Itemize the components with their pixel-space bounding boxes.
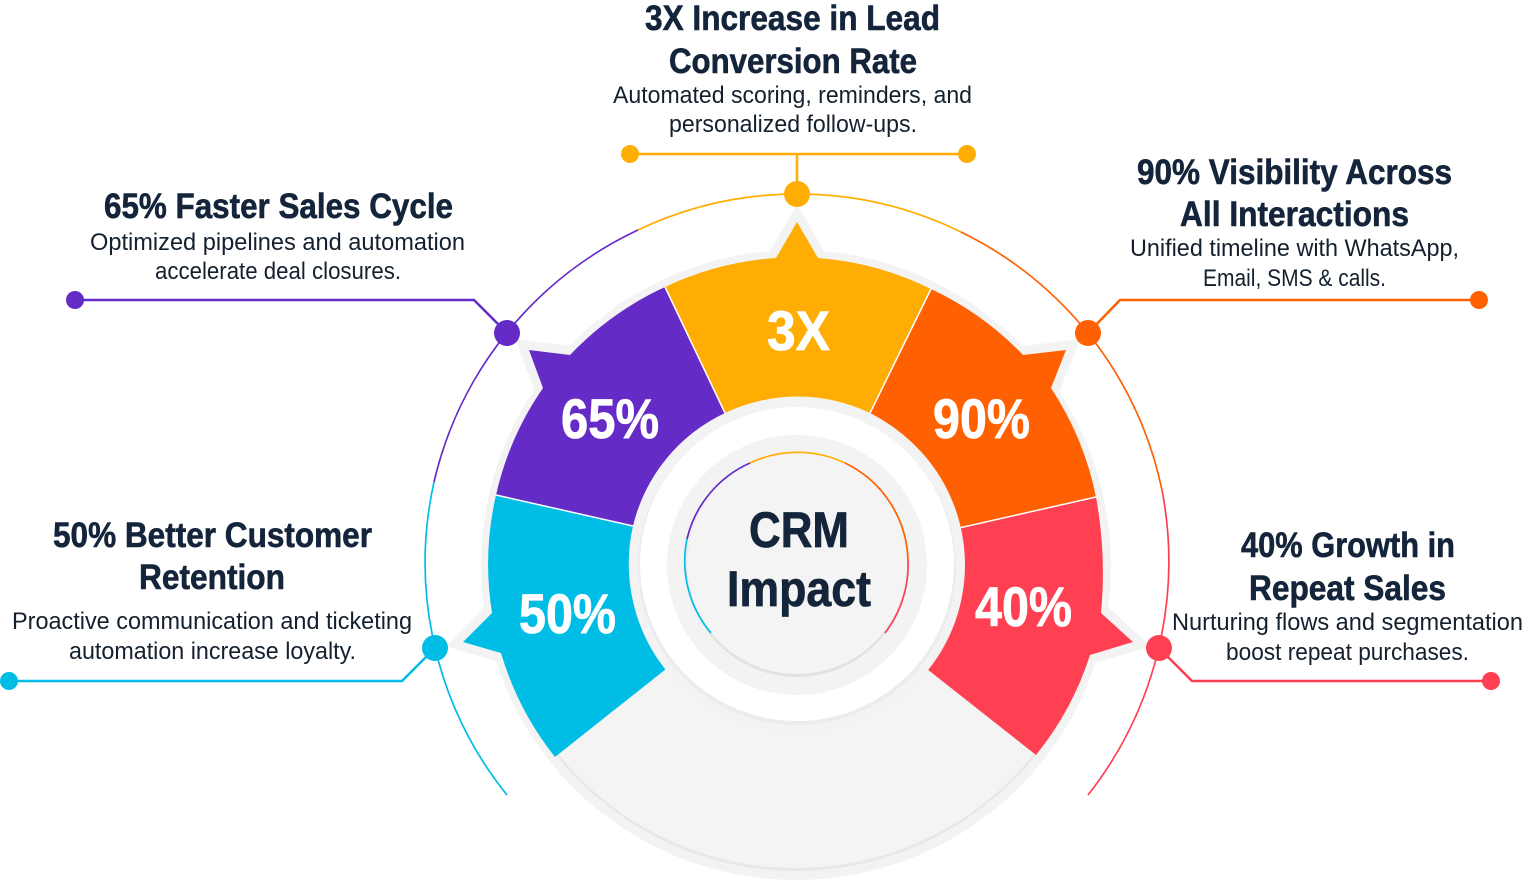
outer segmented arc [425, 194, 1169, 795]
text block: 40% Growth: Nurturing flows and segmentation [1172, 609, 1523, 636]
centre title: CRM [749, 502, 849, 558]
text block: 65% Faster: 65% Faster Sales Cycle [104, 187, 453, 226]
text block: 65% Faster: accelerate deal closures. [155, 258, 401, 285]
text block: 3X Increase: Automated scoring, reminders, and [613, 82, 972, 109]
centre title: Impact [727, 561, 871, 617]
text block: 50% Better: Proactive communication and ticketing [12, 608, 412, 635]
text block: 40% Growth: 40% Growth in [1241, 526, 1455, 565]
segment values: 40% [975, 575, 1072, 638]
segment values: 90% [933, 387, 1030, 450]
text block: 50% Better: automation increase loyalty. [69, 638, 356, 665]
segment values: 65% [561, 387, 659, 450]
text block: 3X Increase [613, 0, 972, 138]
text block: 3X Increase: personalized follow-ups. [669, 111, 917, 138]
text block: 40% Growth: boost repeat purchases. [1226, 639, 1469, 666]
centre hub [629, 397, 965, 733]
text block: 90% Visibility [1130, 153, 1459, 292]
text block: 90% Visibility: All Interactions [1180, 195, 1409, 234]
inner segmented arc [685, 452, 908, 633]
segment: 3X [665, 222, 931, 413]
text block: 65% Faster: Optimized pipelines and automation [90, 229, 465, 256]
segment values: 3X [767, 299, 830, 362]
segment: 65% [496, 287, 725, 526]
segment values [519, 299, 1072, 645]
centre title [727, 502, 871, 617]
text block: 40% Growth: Repeat Sales [1249, 569, 1446, 608]
text block: 90% Visibility: Unified timeline with WhatsApp, [1130, 235, 1459, 262]
text block: 90% Visibility: Email, SMS & calls. [1203, 265, 1386, 292]
text block: 90% Visibility: 90% Visibility Across [1137, 153, 1452, 192]
connector: 3X [621, 145, 976, 207]
segment: 90% [870, 289, 1096, 528]
segment dividers [496, 287, 1096, 528]
text block: 50% Better: 50% Better Customer [53, 516, 372, 555]
connector: 90% [1075, 291, 1488, 346]
connector: 65% [66, 291, 520, 346]
segment values: 50% [519, 582, 616, 645]
text block: 65% Faster [90, 187, 465, 285]
connector: 50% [0, 635, 448, 690]
text block: 3X Increase: Conversion Rate [669, 42, 917, 81]
text block: 50% Better [12, 516, 412, 665]
segment: 50% [463, 495, 666, 757]
segment: 40% [927, 497, 1133, 755]
text block: 50% Better: Retention [139, 558, 285, 597]
text block: 3X Increase: 3X Increase in Lead [645, 0, 940, 38]
text block: 40% Growth [1172, 526, 1523, 666]
connector: 40% [1146, 635, 1500, 690]
wheel grey base [463, 222, 1133, 880]
